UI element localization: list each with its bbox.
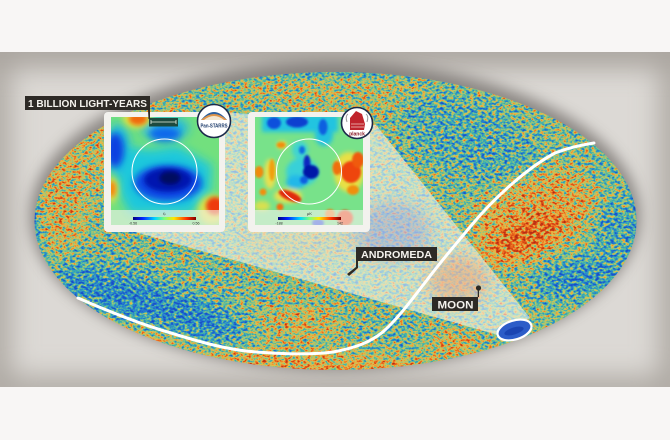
colorbar strip xyxy=(111,210,219,225)
colorbar: fₚ xyxy=(163,211,166,216)
panel: Pan-STARRS map xyxy=(104,108,226,232)
icon: Planck badge: planck xyxy=(349,132,365,138)
sky map xyxy=(34,72,636,370)
colorbar xyxy=(129,211,200,226)
colorbar xyxy=(275,211,343,226)
map ring xyxy=(132,139,197,204)
heat map xyxy=(111,117,219,225)
colorbar: μK xyxy=(307,211,312,216)
label: 1 billion light-years xyxy=(25,96,150,119)
colorbar: -188 xyxy=(275,222,283,226)
heat map xyxy=(254,115,364,227)
icon: Planck badge xyxy=(342,108,372,138)
label: 1 billion light-years: 1 BILLION LIGHT-YEARS xyxy=(28,99,147,110)
colorbar strip xyxy=(255,210,363,225)
map ring xyxy=(276,139,342,204)
light cone xyxy=(135,112,530,335)
icon: Pan-STARRS badge xyxy=(198,104,230,138)
colorbar: 142 xyxy=(337,222,343,226)
temperature field with speckle xyxy=(34,72,636,370)
icon: Pan-STARRS badge: Pan-STARRS xyxy=(200,124,228,130)
infographic xyxy=(0,52,670,387)
colorbar: 0.56 xyxy=(192,222,200,226)
label: Andromeda: ANDROMEDA xyxy=(361,250,432,261)
panel: Planck map xyxy=(248,112,370,232)
background panel xyxy=(0,52,670,387)
moon patch xyxy=(495,316,534,344)
label: Moon: MOON xyxy=(438,300,474,312)
cone tints xyxy=(240,202,488,304)
label: Andromeda xyxy=(347,247,437,276)
white ecliptic curve xyxy=(78,143,594,354)
label: Moon xyxy=(432,285,481,312)
colorbar: -0.56 xyxy=(129,222,137,226)
scale bar xyxy=(149,118,178,126)
